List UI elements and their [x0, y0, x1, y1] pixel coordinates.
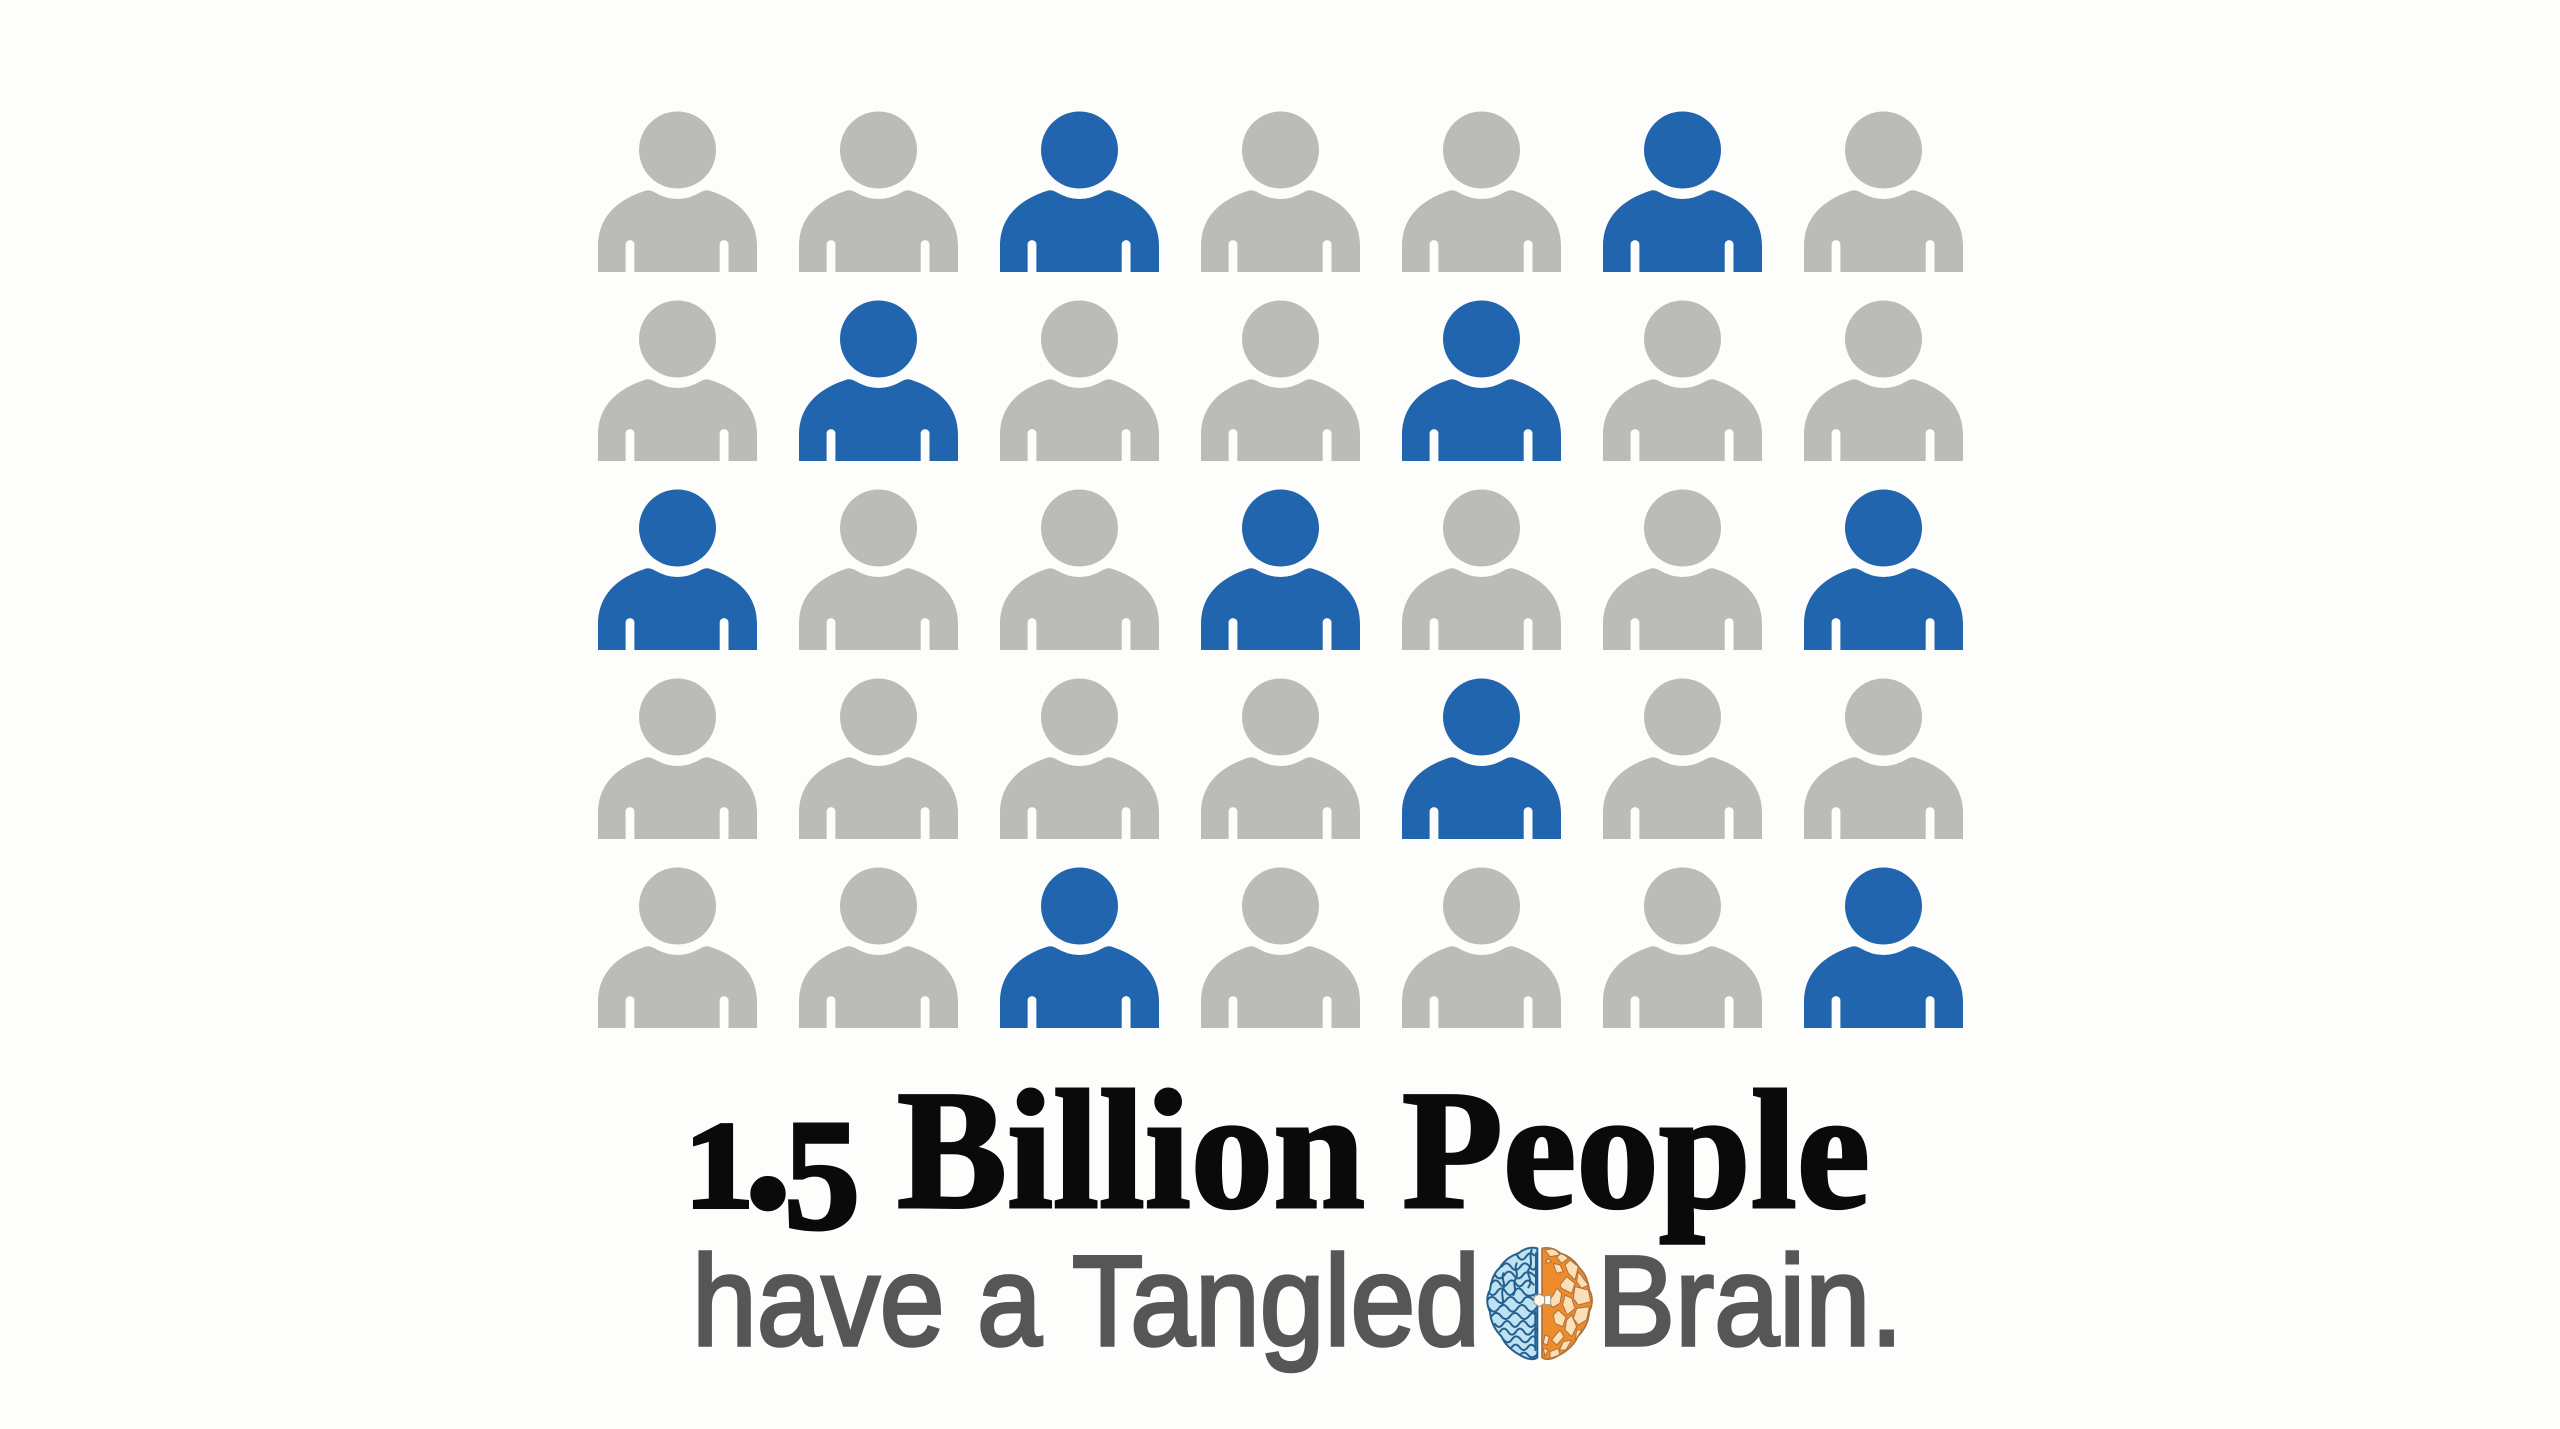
subtitle: have a Tangled Brain.: Brain.	[1597, 1230, 1903, 1373]
central knot	[1534, 1294, 1551, 1307]
icon: two-tone brain	[1487, 1248, 1592, 1359]
right hemisphere: orange	[1542, 1248, 1592, 1359]
title: 1.5 Billion People: 5	[784, 1088, 860, 1263]
pictogram grid: 35 people, 10 highlighted	[598, 112, 1963, 1028]
row 5	[598, 868, 1963, 1028]
row 1	[598, 112, 1963, 272]
title: 1.5 Billion People	[684, 1030, 1870, 1263]
row 4	[598, 678, 1963, 839]
title: 1.5 Billion People: 1	[684, 1097, 754, 1234]
title: 1.5 Billion People: Billion	[897, 1056, 1365, 1244]
row 2	[598, 300, 1963, 461]
subtitle: have a Tangled Brain.: have a Tangled	[692, 1230, 1480, 1373]
title: 1.5 Billion People: People	[1402, 1056, 1870, 1244]
left hemisphere: blue	[1487, 1248, 1537, 1359]
row 3	[598, 490, 1963, 650]
title: 1.5 Billion People: .	[743, 1030, 793, 1251]
